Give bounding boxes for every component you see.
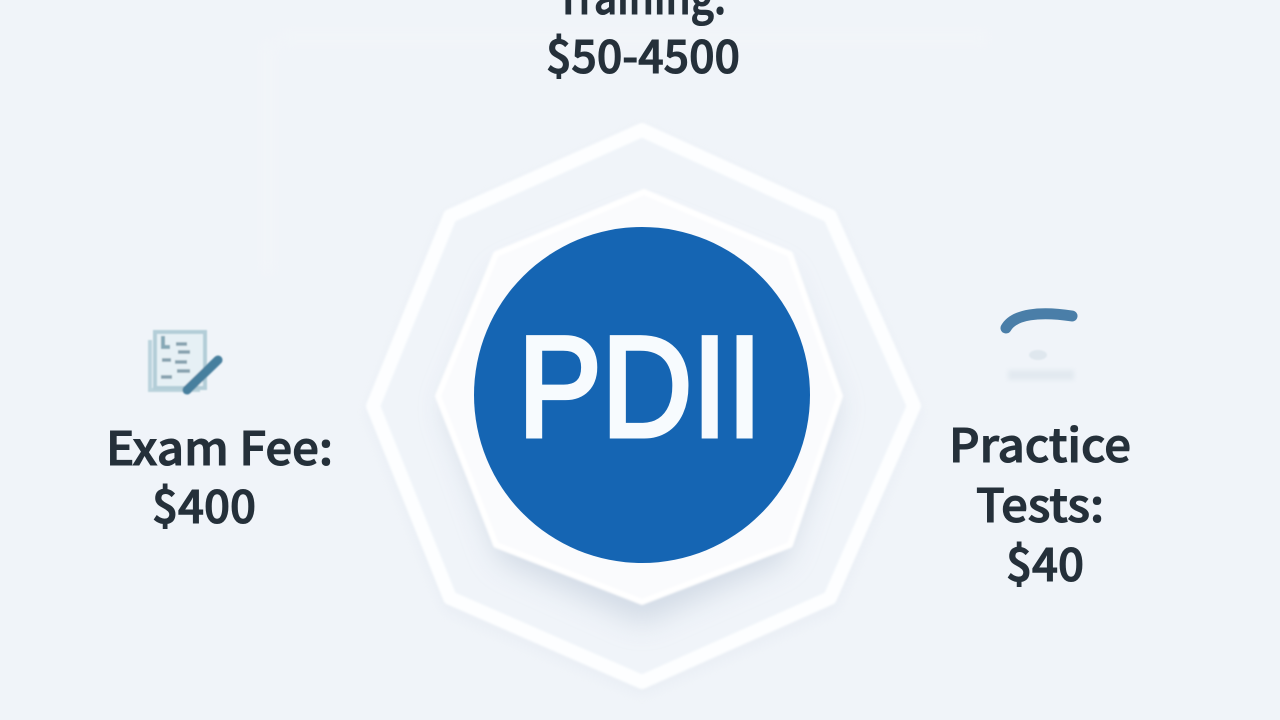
label: exam fee: Exam Fee:: [106, 413, 333, 479]
outer octagon ring: [373, 130, 914, 688]
icon: exam document and pen: [150, 332, 218, 390]
label: exam fee: [106, 413, 333, 537]
label: practice tests: $40: [1006, 529, 1084, 595]
icon: practice tests arc: [1006, 314, 1074, 380]
label: practice tests: Tests:: [976, 470, 1104, 536]
label: practice tests: Practice: [949, 410, 1131, 476]
label: exam fee: $400: [152, 471, 256, 537]
center badge: PDII: [474, 227, 810, 563]
center badge: PDII: PDII: [518, 308, 762, 467]
label: practice tests: [949, 410, 1131, 595]
label: training cost: $50-4500: [546, 21, 740, 87]
inner octagon plate: [438, 192, 840, 624]
